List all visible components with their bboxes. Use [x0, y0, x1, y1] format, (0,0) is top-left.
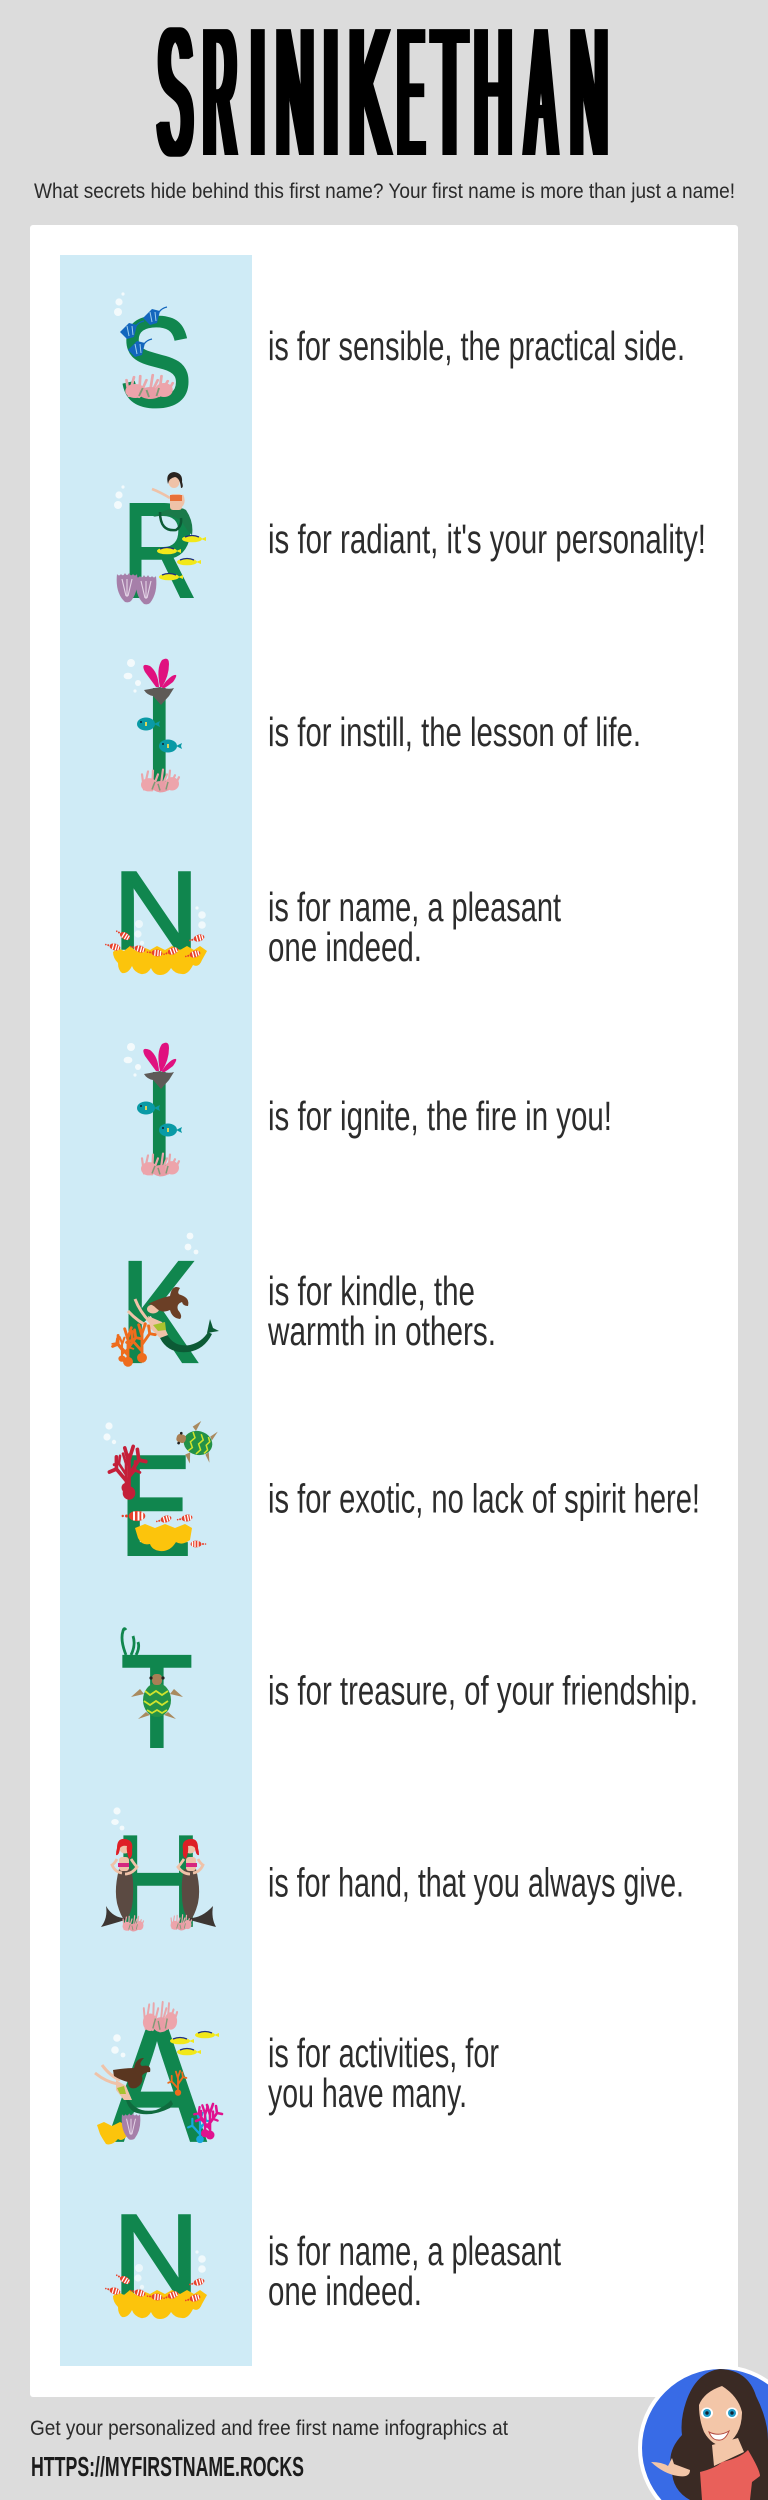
text: N: one indeed. [268, 924, 422, 970]
text: N: one indeed. [268, 2268, 422, 2314]
text: K: is for kindle, the [268, 1268, 475, 1314]
row: K [112, 1231, 496, 1392]
text: N: is for name, a pleasant [268, 2228, 561, 2274]
letter illustration: I [124, 1043, 182, 1201]
letter illustration: T: T [121, 1629, 193, 1775]
letter illustration: N: N [113, 850, 199, 972]
text: N [268, 884, 561, 970]
text: A: is for activities, for [268, 2030, 499, 2076]
letter illustration: K: K [120, 1231, 197, 1392]
letter illustration: I: I [144, 1043, 175, 1201]
panel: light blue letter column [60, 255, 252, 2366]
text: I: is for ignite, the fire in you! [268, 1093, 612, 1139]
text: N: is for name, a pleasant [268, 884, 561, 930]
row: A [95, 1987, 499, 2177]
row: N last [104, 2192, 561, 2319]
letter illustration: E [103, 1416, 219, 1585]
letter illustration: I: I [144, 659, 175, 817]
letter illustration: I [124, 659, 182, 817]
row: I second [124, 1043, 612, 1201]
footer text: call to action: Get your personalized and free first name infographics at [30, 2417, 508, 2440]
text: A: you have many. [268, 2070, 467, 2116]
letter illustration: A: A [108, 1987, 206, 2177]
text: N [268, 2228, 561, 2314]
letter illustration: N: N [113, 2192, 199, 2318]
letter illustration: R: R [122, 477, 197, 626]
text: A [268, 2030, 499, 2116]
row: N [104, 850, 561, 975]
text: K: warmth in others. [267, 1308, 496, 1354]
letter illustration: H: H [115, 1809, 201, 1954]
letter illustration: S: S [119, 292, 192, 434]
avatar: woman in blue circle [640, 2367, 768, 2500]
row: I [124, 659, 641, 817]
row: R [114, 472, 706, 626]
row: S [114, 292, 685, 434]
text: K [267, 1268, 496, 1354]
row: T [121, 1629, 698, 1775]
footer text: url: HTTPS://MYFIRSTNAME.ROCKS [31, 2451, 304, 2482]
row: H [101, 1807, 684, 1954]
row: E [103, 1416, 700, 1585]
letter illustration: E: E [120, 1426, 191, 1585]
